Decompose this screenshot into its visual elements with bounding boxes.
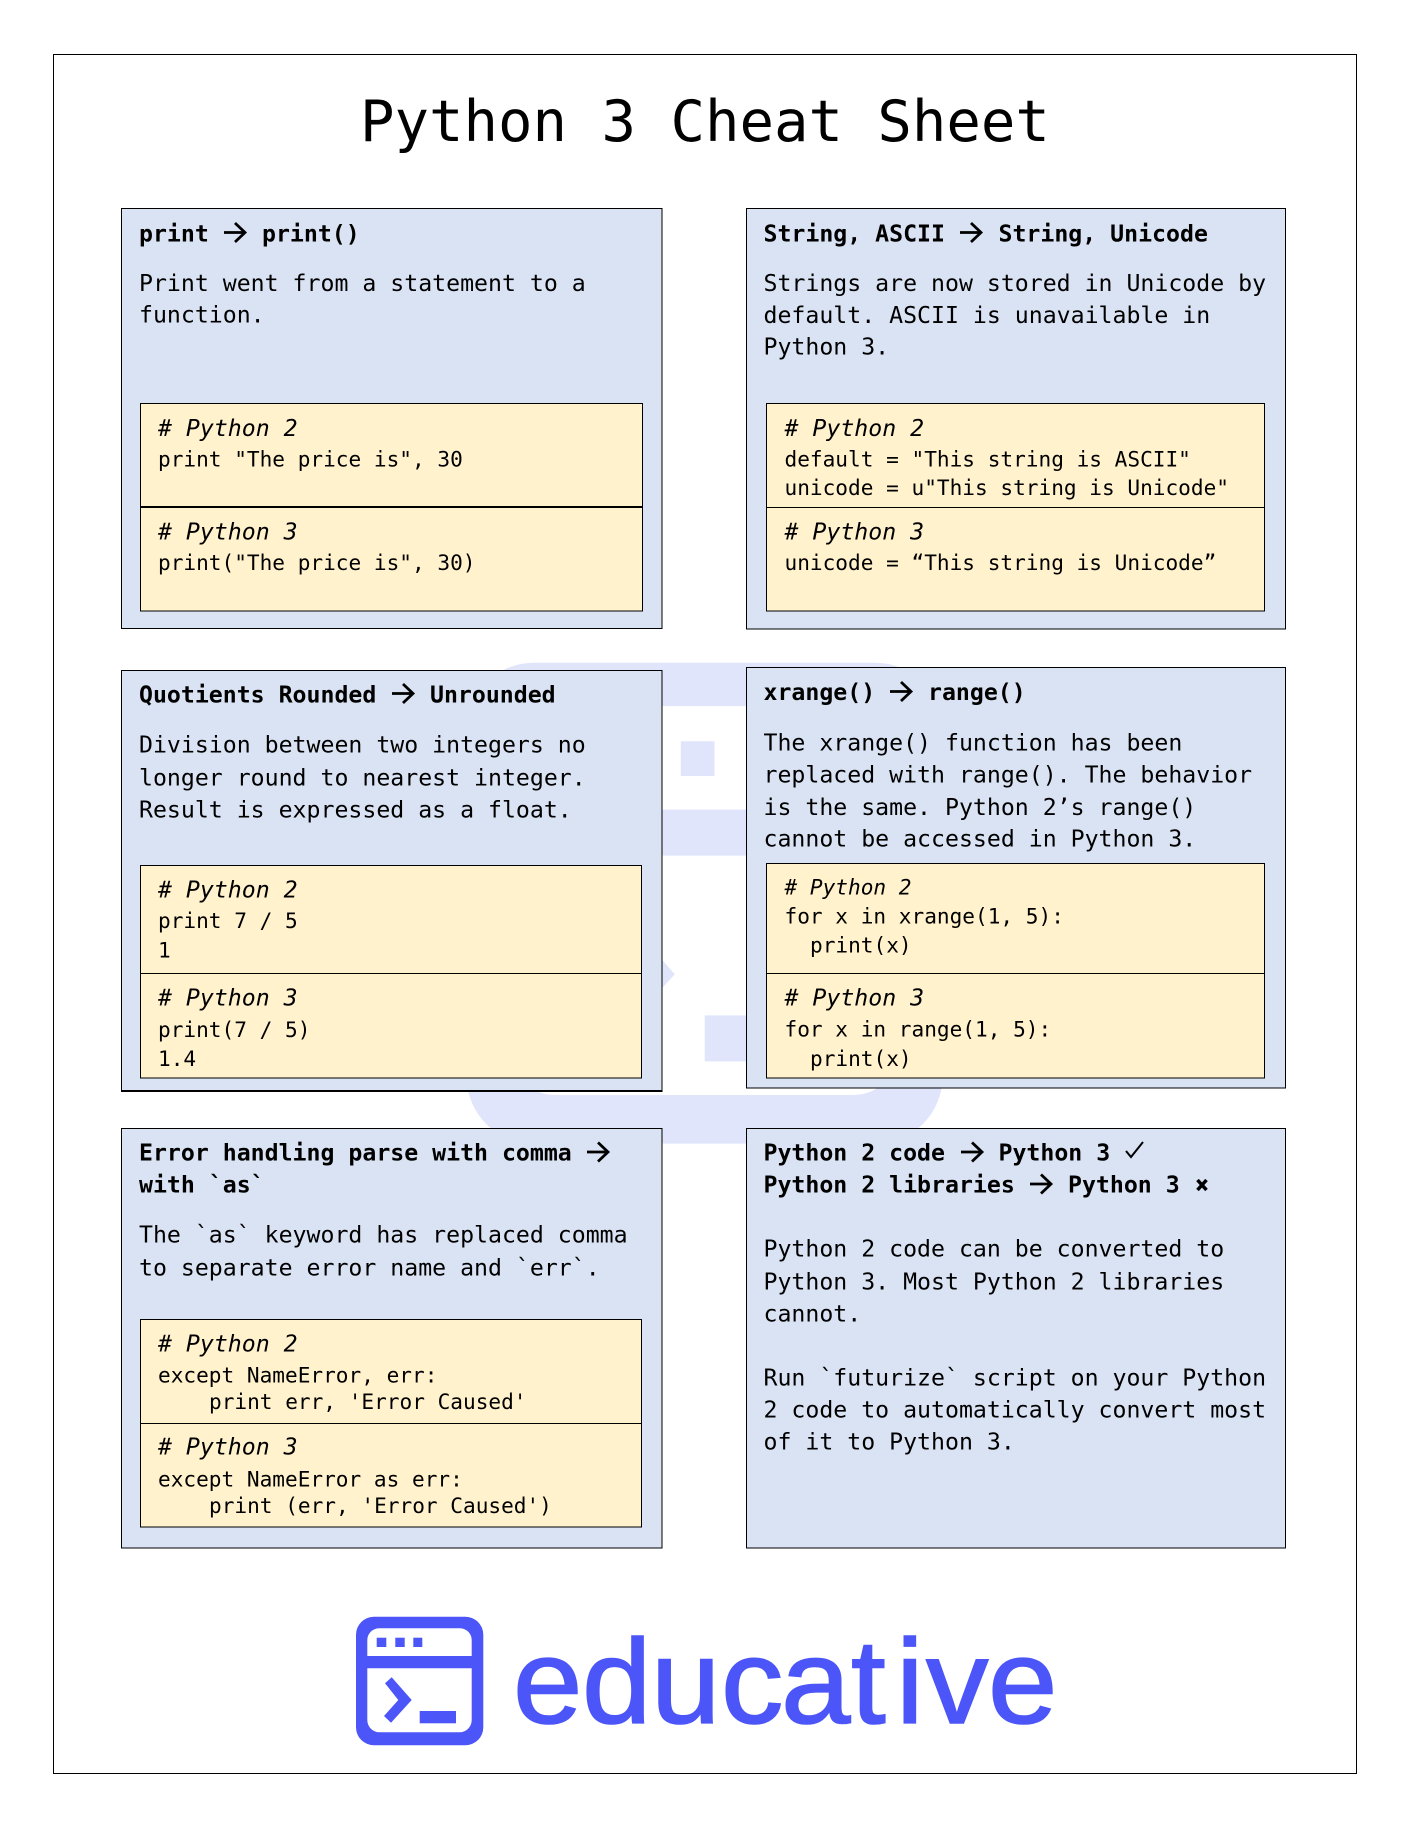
description: replaced with range(). The behavior (764, 762, 1252, 789)
code box: print (err, 'Error Caused') (209, 1493, 552, 1518)
code box: 1.4 (158, 1046, 196, 1071)
code box: print(x) (810, 933, 912, 958)
description: Strings are now stored in Unicode by (764, 270, 1266, 297)
heading: print to print(): print (139, 220, 209, 248)
code box: # Python 2 (157, 1331, 298, 1358)
code box: print "The price is", 30 (158, 446, 463, 472)
code box: except NameError as err: (158, 1466, 463, 1491)
panel: xrange (746, 668, 1286, 1088)
code box: for x in range(1, 5): (784, 1017, 1051, 1042)
code box (766, 864, 1264, 1078)
description: Python 2 code can be converted to (764, 1236, 1224, 1263)
description: cannot. (764, 1301, 861, 1328)
heading: xrange to range: range() (928, 679, 1026, 706)
panel: print (122, 208, 662, 628)
code box (140, 866, 642, 1078)
code box: 1 (158, 938, 171, 963)
description: cannot be accessed in Python 3. (764, 826, 1196, 853)
description: Run `futurize` script on your Python (764, 1365, 1266, 1392)
code box: # Python 2 (157, 877, 298, 904)
heading: String ASCII to String Unicode: String, Unicode (998, 220, 1208, 248)
heading: error handling: Error handling parse with comma (139, 1140, 572, 1167)
wordmark: educative (513, 1614, 1057, 1748)
description: The xrange() function has been (764, 730, 1182, 757)
description: is the same. Python 2’s range() (764, 794, 1196, 821)
panel: libraries (746, 1128, 1286, 1548)
code box (140, 404, 642, 611)
code box: print("The price is", 30) (158, 550, 476, 575)
code box: print(x) (810, 1046, 912, 1071)
heading: code and libraries conversion: Python 2 code (764, 1140, 945, 1167)
code box: # Python 3 (157, 985, 298, 1012)
code box: unicode = “This string is Unicode” (784, 550, 1216, 575)
description: The `as` keyword has replaced comma (139, 1222, 628, 1249)
heading: code and libraries conversion: Python 2 libraries (764, 1171, 1015, 1198)
heading: Quotients Rounded to Unrounded (139, 682, 556, 708)
heading: error handling (139, 1140, 608, 1198)
code box (766, 404, 1264, 611)
description: Python 3. Most Python 2 libraries (764, 1268, 1224, 1295)
code box: # Python 2 (784, 874, 912, 899)
panel: error handling (122, 1128, 662, 1548)
code box: print 7 / 5 (158, 908, 298, 933)
heading: code and libraries conversion: Python 3 (998, 1140, 1110, 1167)
description: 2 code to automatically convert most (764, 1397, 1266, 1424)
title: Python 3 Cheat Sheet (360, 88, 1050, 155)
panel: quotients (121, 670, 662, 1091)
description: Division between two integers no (139, 732, 586, 759)
code box: # Python 2 (157, 415, 298, 442)
heading: xrange to range (764, 679, 1026, 706)
code box: for x in xrange(1, 5): (784, 903, 1064, 928)
description: to separate error name and `err`. (139, 1255, 600, 1282)
code box: # Python 3 (784, 985, 924, 1012)
heading: String ASCII to String Unicode (764, 220, 1208, 248)
description: Python 3. (764, 334, 889, 361)
description: default. ASCII is unavailable in (764, 302, 1210, 329)
heading: Quotients Rounded to Unrounded: Unrounded (430, 682, 556, 708)
description: function. (139, 302, 265, 328)
description: Result is expressed as a float. (139, 797, 572, 824)
heading: Quotients Rounded to Unrounded: Quotients Rounded (139, 682, 376, 708)
panel: string unicode (746, 208, 1286, 629)
heading: error handling: with `as` (139, 1171, 265, 1198)
heading: code and libraries conversion: Python 3 (1068, 1171, 1180, 1198)
heading: print to print(): print() (262, 220, 360, 248)
watermark logo (466, 663, 943, 1144)
heading: code and libraries conversion (764, 1140, 1206, 1198)
code box: except NameError, err: (158, 1362, 437, 1387)
code box: # Python 3 (157, 518, 298, 546)
code box (140, 1320, 642, 1527)
heading: String ASCII to String Unicode: String, ASCII (764, 220, 945, 248)
code box: print err, 'Error Caused' (209, 1389, 526, 1414)
code box: # Python 3 (157, 1433, 298, 1460)
code box: default = "This string is ASCII" (784, 446, 1191, 472)
code box: print(7 / 5) (158, 1017, 310, 1042)
code box: # Python 3 (784, 518, 924, 546)
code box: unicode = u"This string is Unicode" (784, 475, 1229, 500)
code box: # Python 2 (784, 415, 924, 442)
description: longer round to nearest integer. (139, 765, 586, 792)
heading: print to print() (139, 220, 360, 248)
description: Print went from a statement to a (139, 270, 586, 297)
description: of it to Python 3. (764, 1428, 1015, 1455)
heading: xrange to range: xrange() (764, 679, 875, 706)
logo: educative (356, 1614, 1057, 1748)
icon: browser terminal (356, 1617, 483, 1745)
